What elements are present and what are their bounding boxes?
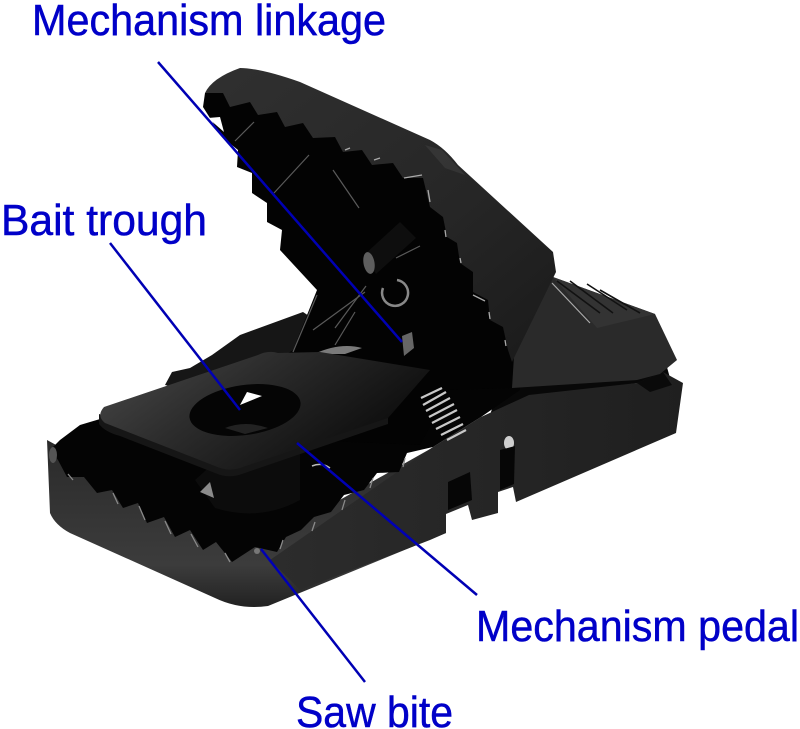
- lower post: [195, 450, 300, 513]
- gap shadow between lever block and base: [490, 360, 670, 415]
- base corner pegs: [49, 447, 57, 463]
- bait plate: [99, 352, 430, 476]
- base body: [47, 360, 683, 607]
- mechanism link end: [402, 332, 414, 356]
- label: bait trough: Bait trough: [1, 196, 207, 245]
- corner highlight: [254, 548, 260, 554]
- pointer: bait trough: [110, 243, 240, 410]
- base rear lip: [637, 372, 672, 392]
- pointer: saw bite: [261, 549, 365, 682]
- jaw tooth highlights: [345, 148, 506, 346]
- rear arm behind the plate: [165, 312, 330, 400]
- striped coil sliver: [314, 346, 362, 354]
- small ring under plate: [312, 464, 330, 468]
- pointer: mechanism pedal: [297, 443, 477, 595]
- jaw cover: [205, 68, 556, 362]
- pin cap: [362, 251, 376, 275]
- rear lever block: [500, 277, 677, 388]
- pin cylinder: [364, 222, 416, 274]
- white gap in jaw: [208, 117, 224, 132]
- tooth highlights: [68, 458, 405, 562]
- block body: [500, 277, 677, 388]
- spring: [421, 388, 466, 440]
- jaw interior: [203, 90, 515, 445]
- long slot: [500, 446, 515, 490]
- upper jaw: [203, 68, 556, 445]
- ridge grooves: [557, 281, 640, 313]
- plate top: [100, 352, 430, 470]
- plate edge: [99, 414, 388, 476]
- base right side face: [270, 372, 683, 590]
- hole light spot: [240, 392, 262, 405]
- pointer: mechanism linkage: [158, 62, 402, 342]
- base left front face: [47, 440, 446, 607]
- pin: [504, 436, 514, 450]
- jaw sheen: [425, 145, 465, 175]
- block ridge top: [553, 277, 655, 328]
- interior ribs: [235, 122, 420, 352]
- square slot: [448, 472, 472, 510]
- bait hole: [186, 377, 304, 443]
- trap illustration: [47, 68, 683, 607]
- ring: [382, 280, 408, 306]
- base interior cavity: [50, 360, 520, 562]
